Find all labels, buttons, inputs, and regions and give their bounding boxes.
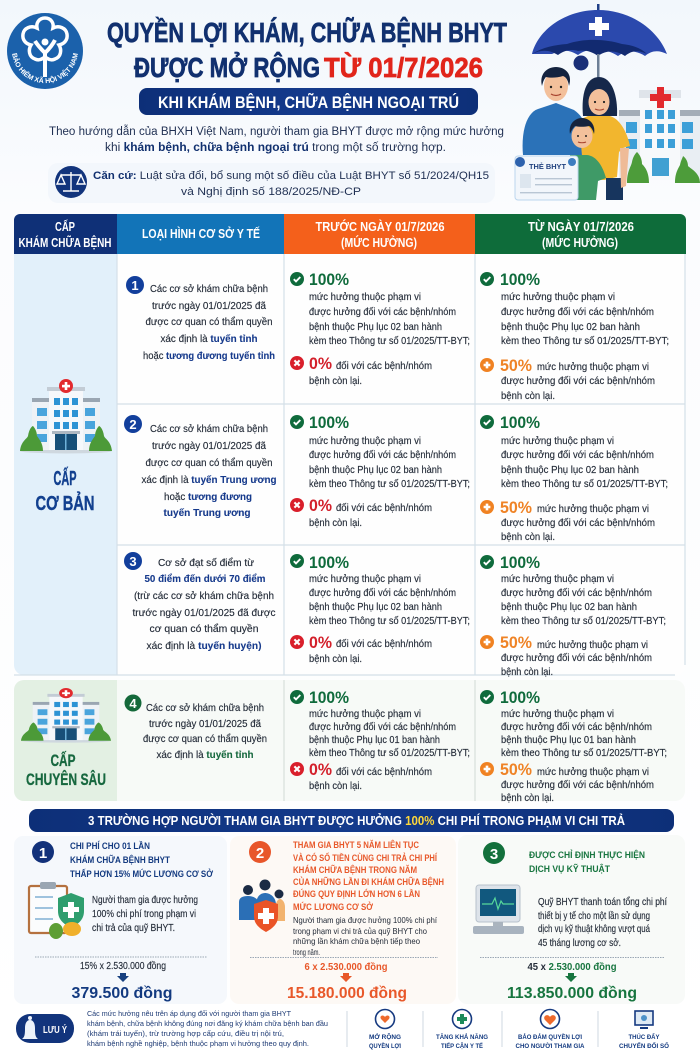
row 1: facility type: hoặc tương đương tuyến tỉnh [143,350,275,362]
row 2: facility type [124,415,276,519]
panel: case 1: 15% x 2.530.000 đồng [80,960,166,972]
panel: case 1: 379.500 đồng [72,985,172,1002]
benefit: thúc đẩy chuyển đổi số: THÚC ĐẨY [628,1032,660,1041]
title [107,17,507,83]
row 4: facility type: trước ngày 01/01/2025 đã [149,719,261,730]
row 3: from 01/7/2026: 50% [500,634,532,652]
panel: case 1: chi trả của quỹ BHYT. [92,922,175,934]
row 3: facility type: 50 điểm đến dưới 70 điểm [144,573,266,585]
panel: case 1: 100% chi phí trong phạm vi [92,909,196,920]
row 4: from 01/7/2026: mức hưởng thuộc phạm vi [537,766,649,778]
row 4: from 01/7/2026: được hưởng đối với các bệnh/nhóm [501,779,654,791]
row 1: from 01/7/2026: bệnh thuộc Phụ lục 02 ban hành [501,322,640,333]
panel: case 2: 15.180.000 đồng [287,985,407,1002]
icon: scales [55,166,87,198]
panel: case 3: ĐƯỢC CHỈ ĐỊNH THỰC HIỆN [529,849,645,861]
panel: case 3: DỊCH VỤ KỸ THUẬT [529,863,610,875]
row 1: before 01/7/2026: bệnh còn lại. [309,376,362,387]
arrow [117,973,129,982]
legal basis: và Nghị định số 188/2025/NĐ-CP [181,186,361,198]
level: cấp cơ bản: CẤP [54,467,76,490]
row 4: before 01/7/2026: 100% [309,689,349,707]
panel: case 1 [14,836,227,1004]
figure: boy [570,118,606,200]
row 3: from 01/7/2026: mức hưởng thuộc phạm vi [537,639,648,651]
section banner: 3 TRƯỜNG HỢP NGƯỜI THAM GIA BHYT ĐƯỢC HƯỞNG 100% CHI PHÍ TRONG PHẠM VI CHI TRẢ [88,813,626,828]
row 3: facility type: (trừ các cơ sở khám chữa bệnh [134,590,274,602]
row 3: from 01/7/2026: mức hưởng thuộc phạm vi [501,573,614,585]
row 1: before 01/7/2026: 0% [309,355,332,373]
panel: case 1: KHÁM CHỮA BỆNH BHYT [70,854,170,866]
row 3: from 01/7/2026: bệnh thuộc Phụ lục 02 ban hành [501,602,637,613]
row 1: from 01/7/2026: 100% [500,271,540,289]
row 2: facility type: hoặc tương đương [164,492,252,503]
panel: case 2: trong năm. [293,947,320,957]
panel: case 2: trong phạm vi chi trả của quỹ BHYT cho [293,926,427,936]
row 1: from 01/7/2026: mức hưởng thuộc phạm vi [537,361,649,373]
row 2: from 01/7/2026: mức hưởng thuộc phạm vi [537,503,649,515]
arrow [565,973,577,982]
table header: LOẠI HÌNH CƠ SỞ Y TẾ [142,226,260,241]
card: thẻ BHYT [515,156,578,200]
benefit: tăng khả năng tiếp cận y tế: TIẾP CẬN Y TẾ [441,1040,484,1050]
figure: man [523,67,584,155]
row 1: facility type: Các cơ sở khám chữa bệnh [150,283,268,295]
row 3: from 01/7/2026: được hưởng đối với các bệnh/nhóm [501,652,652,664]
benefit: thúc đẩy chuyển đổi số: CHUYỂN ĐỔI SỐ [619,1040,669,1050]
row 4: before 01/7/2026: bệnh thuộc Phụ lục 01 ban hành [309,735,440,746]
panel: case 1: CHI PHÍ CHO 01 LẦN [70,841,150,852]
row 2: facility type: xác định là tuyến Trung ương [142,474,276,486]
row 4: facility type: Các cơ sở khám chữa bệnh [146,702,264,714]
illustration: family under umbrella with hospital and BHYT card [515,4,700,200]
benefit: thúc đẩy chuyển đổi số [619,1011,669,1050]
row 2: before 01/7/2026: 100% [309,414,349,432]
intro paragraph: khi khám bệnh, chữa bệnh ngoại trú trong một số trường hợp. [105,142,446,154]
intro paragraph: Theo hướng dẫn của BHXH Việt Nam, người tham gia BHYT được mở rộng mức hưởng [49,125,504,138]
panel: case 2: những lần khám chữa bệnh tiếp theo [293,936,420,946]
row 1: before 01/7/2026: đối với các bệnh/nhóm [336,360,432,372]
panel: case 2: 6 x 2.530.000 đồng [304,961,388,973]
panel: case 2: Người tham gia được hưởng 100% chi phí [293,915,438,925]
row 1: from 01/7/2026: được hưởng đối với các bệnh/nhóm [501,306,654,318]
row 3: from 01/7/2026: 100% [500,554,540,572]
row 3: facility type: xác định là tuyến huyện) [146,640,262,652]
panel: case 3: 3 [490,846,498,863]
row 4: before 01/7/2026: đối với các bệnh/nhóm [336,766,432,778]
panel: case 3: Quỹ BHYT thanh toán tổng chi phí [538,896,667,908]
row 1: from 01/7/2026: mức hưởng thuộc phạm vi [501,291,615,303]
row 1: from 01/7/2026: được hưởng đối với các bệnh/nhóm [501,375,655,387]
row 1: facility type: xác định là tuyến tỉnh [160,333,258,345]
row 3: facility type: trước ngày 01/01/2025 đã được [132,608,276,619]
row 3: before 01/7/2026: mức hưởng thuộc phạm vi [309,573,421,585]
icon: clipboard with shield and coins [29,882,84,939]
figure: woman [579,77,630,200]
row 2: facility type: tuyến Trung ương [164,507,250,519]
row 2: facility type: được cơ quan có thẩm quyền [146,457,272,469]
row 1: facility type: được cơ quan có thẩm quyền [146,316,272,328]
row 4: facility type: được cơ quan có thẩm quyền [143,733,267,745]
icon: umbrella [532,4,667,78]
table header: (MỨC HƯỞNG) [542,235,618,250]
row 3: before 01/7/2026: được hưởng đối với các bệnh/nhóm [309,587,456,599]
row 4: from 01/7/2026: được hưởng đối với các bệnh/nhóm [501,721,652,733]
benefit: mở rộng quyền lợi [369,1010,401,1050]
row 2: from 01/7/2026: 100% [500,414,540,432]
row 1: before 01/7/2026: được hưởng đối với các bệnh/nhóm [309,306,456,318]
level: cấp cơ bản: CƠ BẢN [36,492,94,515]
panel: case 3: thiết bị y tế cho một lần sử dụng [538,910,650,922]
row 4: before 01/7/2026: mức hưởng thuộc phạm vi [309,708,421,720]
row 2: before 01/7/2026: 0% [309,497,332,515]
row 4: facility type [124,694,267,761]
row 4: from 01/7/2026 [480,689,667,804]
row 3: before 01/7/2026: đối với các bệnh/nhóm [336,638,432,650]
row 2: facility type: Các cơ sở khám chữa bệnh [150,423,268,435]
row 1: before 01/7/2026: mức hưởng thuộc phạm vi [309,291,421,303]
legal basis: Căn cứ: Luật sửa đổi, bổ sung một số điều của Luật BHYT số 51/2024/QH15 [93,170,489,182]
icon: hospital building [619,87,700,183]
logo: Bảo hiểm xã hội Việt Nam: BẢO HIỂM XÃ HỘI VIỆT NAM [12,53,78,84]
row 2: facility type: 2 [129,417,137,432]
panel: case 3: 45 x 2.530.000 đồng [528,961,616,973]
row 1: before 01/7/2026 [290,271,470,387]
row 2: facility type: trước ngày 01/01/2025 đã [152,441,266,452]
row 4: from 01/7/2026: bệnh còn lại. [501,793,554,804]
panel: case 2: ĐÚNG QUY ĐỊNH LỚN HƠN 6 LẦN [293,888,420,899]
row 2: from 01/7/2026: 50% [500,499,532,517]
row 3: from 01/7/2026: kèm theo Thông tư số 01/2025/TT-BYT; [501,615,666,627]
row 4: from 01/7/2026: bệnh thuộc Phụ lục 01 ban hành [501,735,636,746]
icon: hospital [21,688,111,743]
row 2: from 01/7/2026: bệnh thuộc Phụ lục 02 ban hành [501,465,639,476]
row 2: from 01/7/2026: được hưởng đối với các bệnh/nhóm [501,517,655,529]
row 3: before 01/7/2026: bệnh thuộc Phụ lục 02 ban hành [309,602,442,613]
benefit: tăng khả năng tiếp cận y tế [436,1010,488,1050]
row 2: before 01/7/2026 [290,414,470,529]
panel: case 2: MỨC LƯƠNG CƠ SỞ [293,901,373,912]
row 1: facility type: 1 [131,278,139,293]
note text: (khám trái tuyến), trừ trường hợp cấp cứu, điều trị nội trú, [87,1029,284,1038]
table header: (MỨC HƯỞNG) [341,235,417,250]
title: TỪ 01/7/2026 [324,52,483,83]
row 3: facility type: cơ quan có thẩm quyền [150,623,258,635]
row 3: facility type: 3 [129,554,137,569]
row 2: from 01/7/2026 [480,414,668,543]
note text: khám bệnh nghề nghiệp, bệnh thuộc phạm vi hưởng theo quy định. [87,1039,309,1048]
panel: case 1: Người tham gia được hưởng [92,894,198,906]
row 2: before 01/7/2026: kèm theo Thông tư số 01/2025/TT-BYT; [309,478,470,490]
benefit: bảo đảm quyền lợi cho người tham gia: BẢO ĐẢM QUYỀN LỢI [518,1031,582,1041]
benefit: bảo đảm quyền lợi cho người tham gia [516,1010,585,1050]
benefit: mở rộng quyền lợi: QUYỀN LỢI [369,1040,401,1050]
arrow [340,973,352,982]
row 1: from 01/7/2026: kèm theo Thông tư số 01/2025/TT-BYT; [501,335,669,347]
row 1: from 01/7/2026: bệnh còn lại. [501,391,555,402]
level: cấp cơ bản [20,379,112,515]
icon: family with shield [239,880,285,932]
row 2: before 01/7/2026: được hưởng đối với các bệnh/nhóm [309,449,456,461]
panel: case 3: 113.850.000 đồng [507,985,637,1002]
row 3: facility type: Cơ sở đạt số điểm từ [158,557,254,569]
note badge: LƯU Ý [43,1023,67,1036]
row 4: before 01/7/2026: kèm theo Thông tư số 01/2025/TT-BYT; [309,747,470,759]
row 2: before 01/7/2026: bệnh thuộc Phụ lục 02 ban hành [309,465,442,476]
row 3: facility type [124,552,276,652]
panel: cấp chuyên sâu [14,680,685,801]
card: thẻ BHYT: THẺ BHYT [529,162,566,171]
icon: hospital [20,379,112,454]
row 4: from 01/7/2026: kèm theo Thông tư số 01/2025/TT-BYT; [501,747,667,759]
panel: case 2: THAM GIA BHYT 5 NĂM LIÊN TỤC [293,839,419,850]
panel: case 2: KHÁM CHỮA BỆNH TRONG NĂM [293,864,417,875]
row 4: before 01/7/2026: bệnh còn lại. [309,781,362,792]
panel: case 1: 1 [39,845,47,862]
panel: case 2: 2 [256,845,264,862]
row 4: before 01/7/2026 [290,689,470,792]
panel: case 2: VÀ CÓ SỐ TIỀN CÙNG CHI TRẢ CHI PHÍ [293,852,437,863]
row 3: before 01/7/2026: bệnh còn lại. [309,654,362,665]
row 1: facility type: trước ngày 01/01/2025 đã [152,301,266,312]
table body: basic level [14,254,685,675]
title: ĐƯỢC MỞ RỘNG [134,51,320,83]
row 2: before 01/7/2026: bệnh còn lại. [309,518,362,529]
row 2: before 01/7/2026: mức hưởng thuộc phạm vi [309,435,421,447]
title: QUYỀN LỢI KHÁM, CHỮA BỆNH BHYT [107,17,507,48]
benefit: mở rộng quyền lợi: MỞ RỘNG [369,1032,401,1041]
panel: case 3: 45 tháng lương cơ sở. [538,937,621,949]
row 4: before 01/7/2026: được hưởng đối với các bệnh/nhóm [309,721,456,733]
row 3: from 01/7/2026 [480,554,666,678]
row 3: before 01/7/2026: 100% [309,554,349,572]
row 4: from 01/7/2026: 100% [500,689,540,707]
section banner [29,809,674,832]
row 1: before 01/7/2026: bệnh thuộc Phụ lục 02 ban hành [309,322,442,333]
row 2: from 01/7/2026: bệnh còn lại. [501,532,555,543]
row 4: from 01/7/2026: 50% [500,761,532,779]
icon: computer monitor with heartbeat [473,885,524,934]
table header [14,214,686,254]
table header: CẤP [55,219,75,234]
row 1: from 01/7/2026: 50% [500,357,532,375]
subtitle pill [139,88,478,115]
row 4: facility type: xác định là tuyến tỉnh [156,749,254,761]
note badge [16,1014,74,1043]
row 2: before 01/7/2026: đối với các bệnh/nhóm [336,502,432,514]
panel: case 1: THẤP HƠN 15% MỨC LƯƠNG CƠ SỞ [70,868,214,880]
table header: KHÁM CHỮA BỆNH [18,235,112,250]
row 1: from 01/7/2026 [480,271,669,402]
table header: TRƯỚC NGÀY 01/7/2026 [316,219,445,234]
intro paragraph [49,125,504,154]
row 3: before 01/7/2026 [290,554,470,665]
row 3: from 01/7/2026: bệnh còn lại. [501,667,553,678]
benefit: tăng khả năng tiếp cận y tế: TĂNG KHẢ NĂNG [436,1032,488,1041]
row 1: before 01/7/2026: kèm theo Thông tư số 01/2025/TT-BYT; [309,335,470,347]
row 4: from 01/7/2026: mức hưởng thuộc phạm vi [501,708,614,720]
logo: Bảo hiểm xã hội Việt Nam [7,13,83,89]
table header: TỪ NGÀY 01/7/2026 [528,219,634,234]
row 4: before 01/7/2026: 0% [309,761,332,779]
note text: khám bệnh, chữa bệnh không đúng nơi đăng ký khám chữa bệnh ban đầu [87,1019,328,1028]
row 1: facility type [126,276,275,362]
panel: case 2: CỦA NHỮNG LẦN ĐI KHÁM CHỮA BỆNH [293,876,444,887]
note text: Các mức hưởng nêu trên áp dụng đối với người tham gia BHYT [87,1009,291,1018]
row 1: before 01/7/2026: 100% [309,271,349,289]
row 3: from 01/7/2026: được hưởng đối với các bệnh/nhóm [501,587,652,599]
row 2: from 01/7/2026: được hưởng đối với các bệnh/nhóm [501,449,654,461]
row 2: from 01/7/2026: mức hưởng thuộc phạm vi [501,435,614,447]
row 3: before 01/7/2026: kèm theo Thông tư số 01/2025/TT-BYT; [309,615,470,627]
benefit: bảo đảm quyền lợi cho người tham gia: CHO NGƯỜI THAM GIA [516,1041,585,1050]
legal basis [48,163,495,203]
note text [87,1009,328,1048]
panel: cấp chuyên sâu: CẤP [50,751,76,770]
panel: case 2 [230,836,456,1004]
row 2: from 01/7/2026: kèm theo Thông tư số 01/2025/TT-BYT; [501,478,668,490]
panel: cấp chuyên sâu: CHUYÊN SÂU [26,770,106,789]
row 4: facility type: 4 [129,696,137,711]
subtitle pill: KHI KHÁM BỆNH, CHỮA BỆNH NGOẠI TRÚ [158,92,459,112]
panel: case 3: dịch vụ kỹ thuật không vượt quá [538,924,650,935]
row 3: before 01/7/2026: 0% [309,634,332,652]
panel: case 3 [458,835,685,1004]
